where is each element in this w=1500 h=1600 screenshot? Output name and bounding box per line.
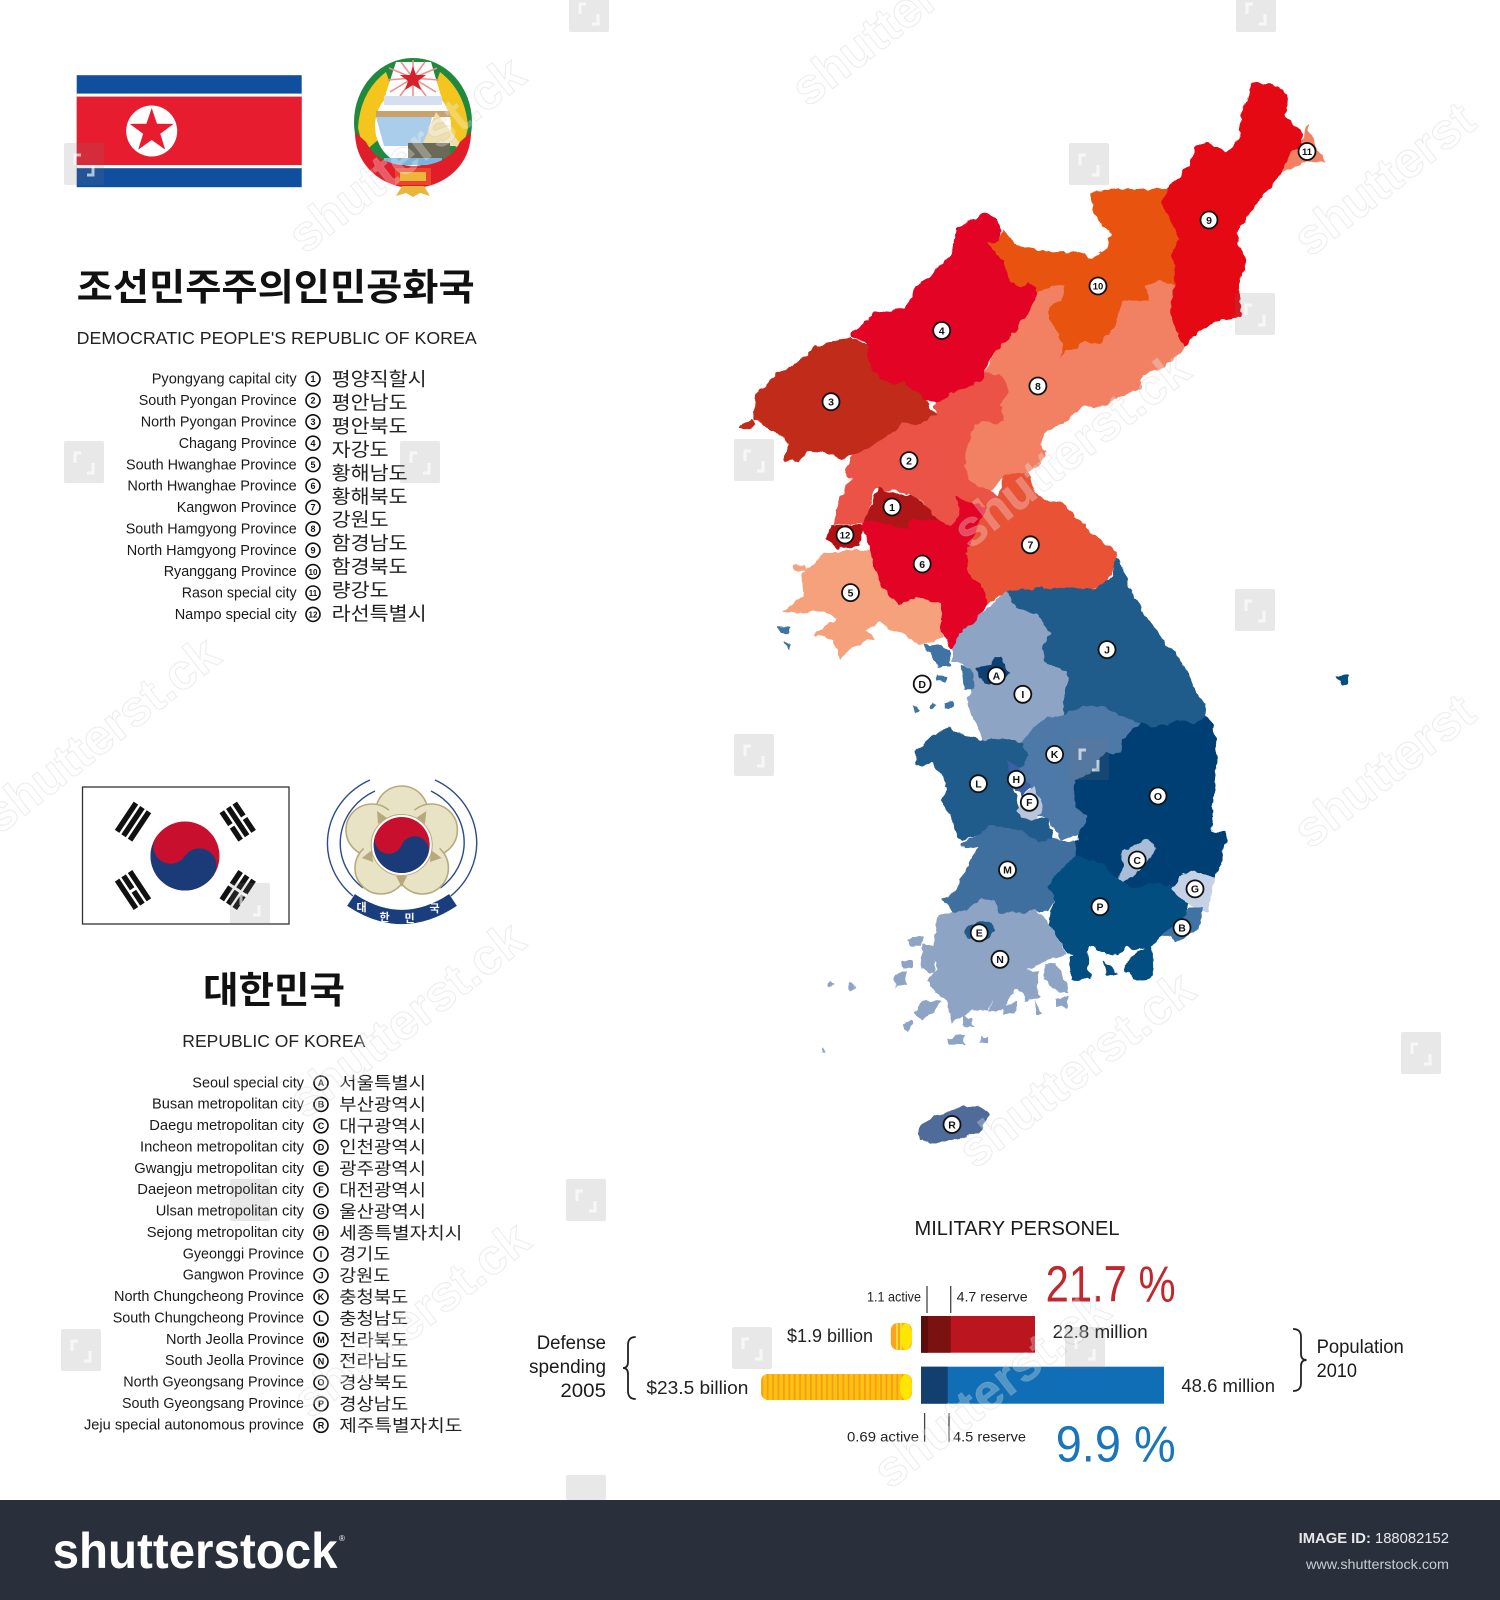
region: Gyeonggi	[953, 592, 1068, 743]
numbered badges: 9	[310, 545, 316, 555]
lettered badges	[314, 1076, 328, 1432]
lettered badges: J	[318, 1271, 324, 1281]
numbered badges: 1	[310, 374, 316, 384]
province names in English: South Hwanghae Province	[126, 456, 297, 473]
brace: defense spending	[623, 1337, 636, 1399]
map badges: South Korea letters: H	[1013, 774, 1020, 786]
label: South Korea active: 0.69 active	[847, 1428, 919, 1444]
footer website: www.shutterstock.com	[1305, 1556, 1449, 1572]
numbered badges	[306, 372, 320, 621]
map badges: South Korea letters: C	[1133, 855, 1141, 867]
numbered badges: 7	[310, 503, 316, 513]
map badges: North Korea numbers: 10	[1093, 282, 1103, 292]
region: Gangwon	[1006, 558, 1207, 728]
map badges: North Korea numbers: 1	[889, 502, 895, 514]
region: South Hamgyong	[965, 281, 1185, 490]
region: Seoul	[976, 658, 1010, 684]
panel: South Korea identity	[82, 780, 477, 1435]
map badges: South Korea letters: P	[1096, 902, 1104, 914]
province names in English: South Gyeongsang Province	[122, 1395, 304, 1412]
map: South Korea regions	[779, 558, 1349, 1144]
map: North Korea regions	[739, 83, 1325, 659]
numbered badges: 4	[310, 438, 316, 448]
label: North Korea active: 1.1 active	[867, 1288, 921, 1304]
province names in English: Jeju special autonomous province	[84, 1416, 304, 1433]
province names in English: Gwangju metropolitan city	[134, 1160, 304, 1177]
province names in Korean: 황해북도	[332, 486, 408, 508]
province names in Korean: 서울특별시	[339, 1074, 426, 1093]
icon: large coin stack	[761, 1374, 912, 1400]
lettered badges: L	[318, 1314, 324, 1324]
region: Ryanggang	[986, 188, 1179, 362]
province names in Korean: 경상북도	[339, 1374, 408, 1393]
stat: North Korea percentage: 21.7 %	[1046, 1256, 1176, 1313]
region: North Gyeongsang	[1073, 718, 1226, 888]
province names in Korean: 함경북도	[332, 556, 408, 578]
numbered badges: 12	[309, 611, 318, 620]
province names in Korean: 라선특별시	[332, 603, 427, 625]
province names in Korean	[339, 1074, 462, 1435]
map badges: North Korea numbers: 12	[840, 530, 850, 542]
map badges: North Korea numbers: 3	[828, 396, 834, 408]
decorative stock watermark: shutterst.ck	[277, 910, 535, 1129]
map: Korean peninsula	[739, 83, 1349, 1144]
map land with rough coastline	[739, 83, 1349, 1144]
province names in English: Nampo special city	[175, 606, 297, 623]
numbered badges: 5	[310, 460, 316, 470]
province names in Korean: 제주특별자치도	[339, 1416, 462, 1435]
province names in English: Gangwon Province	[183, 1267, 304, 1284]
map badges: South Korea letters: R	[948, 1119, 956, 1131]
region: Sejong	[1007, 760, 1029, 795]
region: Kangwon	[955, 473, 1117, 605]
map badges: South Korea letters: J	[1104, 644, 1110, 656]
province names in English: North Chungcheong Province	[114, 1288, 304, 1305]
lettered badges: H	[318, 1228, 324, 1238]
lettered badges: P	[318, 1399, 324, 1409]
province names in Korean: 충청남도	[339, 1309, 408, 1328]
region: Nampo	[826, 525, 864, 548]
bar: South Korea population	[921, 1367, 1164, 1404]
map badges: South Korea letters: M	[1003, 865, 1012, 877]
province names in English: North Pyongan Province	[141, 414, 297, 430]
label: North Korea reserve: 4.7 reserve	[957, 1288, 1028, 1304]
heading: North Korea Korean name: 조선민주주의인민공화국	[77, 267, 475, 308]
icon: South Korea emblem: 국	[430, 902, 440, 915]
region: North Jeolla	[943, 825, 1075, 914]
label: North Korea population: 22.8 million	[1053, 1322, 1148, 1342]
lettered badges: A	[318, 1078, 325, 1088]
region: North Hwanghae	[862, 498, 986, 647]
province names in Korean: 함경남도	[332, 533, 408, 555]
region: Ulsan	[1173, 871, 1215, 912]
label: population 2010: 2010	[1317, 1360, 1357, 1382]
region: Daegu	[1119, 841, 1154, 880]
province names in English: North Gyeongsang Province	[123, 1374, 304, 1391]
province names in Korean: 대전광역시	[339, 1181, 426, 1200]
province names in Korean: 대구광역시	[339, 1117, 426, 1136]
province names in English: Chagang Province	[179, 435, 297, 452]
label: defense spending: 2005	[560, 1380, 606, 1402]
label: South Korea reserve: 4.5 reserve	[953, 1428, 1026, 1444]
numbered badges: 6	[310, 481, 316, 491]
province names in English: Ryanggang Province	[164, 563, 297, 580]
region: Jeju	[918, 1106, 988, 1144]
icon: South Korea emblem	[327, 780, 477, 925]
map badges: North Korea numbers: 9	[1206, 215, 1212, 227]
province names in English: Daejeon metropolitan city	[137, 1181, 304, 1198]
numbered badges: 10	[309, 568, 318, 577]
decorative stock watermark: shutterst	[1282, 91, 1486, 267]
province names in Korean: 량강도	[332, 579, 389, 601]
footer bar	[0, 1500, 1500, 1600]
panel: military personnel comparison	[529, 1218, 1404, 1473]
map badges: North Korea numbers: 11	[1302, 147, 1313, 158]
map badges: South Korea letters: O	[1154, 791, 1162, 803]
map badges: North Korea numbers	[822, 143, 1316, 601]
province names in Korean: 울산광역시	[339, 1202, 426, 1221]
map badges: South Korea letters: N	[996, 954, 1004, 966]
map badges: South Korea letters: L	[975, 778, 982, 790]
province names in English: Incheon metropolitan city	[140, 1138, 304, 1155]
province names in Korean: 평안남도	[332, 392, 408, 414]
province names in English: North Hamgyong Province	[127, 542, 297, 559]
decorative stock watermark: shutterst.ck	[947, 960, 1205, 1179]
map badges: North Korea numbers: 5	[848, 587, 854, 599]
tick marks: active and reserve	[925, 1286, 951, 1442]
lettered badges: M	[317, 1335, 325, 1345]
decorative stock watermark: shutterst.ck	[862, 1280, 1120, 1499]
lettered badges: K	[318, 1292, 325, 1302]
province names in Korean: 강원도	[332, 509, 389, 531]
province names in English: Daegu metropolitan city	[149, 1117, 304, 1134]
footer image id: IMAGE ID: 188082152	[1299, 1530, 1449, 1547]
region: North Pyongan	[739, 337, 937, 462]
map badges: North Korea numbers: 8	[1035, 381, 1041, 393]
region: Rason	[1280, 125, 1325, 173]
decorative stock watermark: shutterst.ck	[942, 340, 1200, 559]
province names in English: Rason special city	[182, 585, 297, 602]
map badges: North Korea numbers: 4	[939, 325, 945, 337]
map badges: South Korea letters	[914, 641, 1204, 1133]
province names in English: Ulsan metropolitan city	[156, 1203, 304, 1220]
flag: North Korea	[77, 75, 302, 187]
region: Incheon	[779, 627, 974, 712]
lettered badges: B	[318, 1100, 325, 1110]
legend: North Korea provinces	[126, 369, 427, 625]
label: population 2010	[1317, 1336, 1404, 1382]
map badges: North Korea numbers: 7	[1027, 540, 1033, 552]
province names in English: South Hamgyong Province	[126, 520, 297, 537]
map badges: North Korea numbers: 6	[919, 559, 925, 571]
province names in Korean: 전라남도	[339, 1352, 408, 1371]
label: defense spending: spending	[529, 1356, 606, 1378]
province names in English	[126, 371, 297, 623]
lettered badges: I	[320, 1249, 322, 1259]
region: Pyongyang	[866, 488, 938, 531]
province names in English: South Chungcheong Province	[113, 1309, 304, 1326]
province names in Korean: 평양직할시	[332, 369, 427, 391]
numbered badges: 11	[309, 589, 318, 598]
legend: South Korea provinces	[84, 1074, 462, 1435]
label: population 2010: Population	[1317, 1336, 1404, 1358]
map badges: South Korea letters: I	[1021, 689, 1024, 701]
heading: military personnel: MILITARY PERSONEL	[914, 1218, 1120, 1240]
province names in English: Gyeonggi Province	[183, 1245, 304, 1262]
province names in Korean: 전라북도	[339, 1331, 408, 1350]
map badges: South Korea letters: F	[1026, 797, 1033, 809]
region: Chagang	[851, 213, 1038, 406]
province names in English: South Jeolla Province	[165, 1352, 304, 1369]
stat: South Korea percentage: 9.9 %	[1056, 1416, 1176, 1473]
lettered badges: E	[318, 1164, 324, 1174]
numbered badges: 3	[310, 417, 316, 427]
province names in Korean: 충청북도	[339, 1288, 408, 1307]
region: Busan	[1161, 908, 1203, 941]
province names in English: Sejong metropolitan city	[147, 1224, 304, 1241]
decorative stock watermark: shutterst.ck	[277, 45, 535, 264]
province names in English: North Jeolla Province	[166, 1331, 304, 1348]
lettered badges: D	[318, 1142, 325, 1152]
map badges: South Korea letters: A	[993, 670, 1001, 682]
footer logo registered mark: ®	[339, 1534, 345, 1543]
icon: South Korea emblem: 한	[380, 910, 390, 924]
numbered badges: 8	[310, 524, 316, 534]
map badges: South Korea letters: D	[918, 679, 926, 691]
lettered badges: O	[317, 1378, 325, 1388]
icon: North Korea emblem	[354, 58, 472, 197]
province names in English: South Pyongan Province	[139, 392, 297, 409]
bar: North Korea population	[921, 1316, 1035, 1353]
map badges: North Korea numbers: 2	[906, 455, 912, 467]
panel: North Korea identity	[77, 58, 477, 625]
region: South Pyongan	[833, 372, 1010, 525]
icon: small coin stack	[891, 1323, 912, 1350]
map badges: South Korea letters: E	[976, 928, 983, 940]
label: defense spending: Defense	[537, 1332, 606, 1354]
province names in English: North Hwanghae Province	[127, 478, 297, 495]
icon: South Korea emblem: 대	[356, 900, 367, 914]
lettered badges: C	[318, 1121, 325, 1131]
province names in English: Kangwon Province	[177, 499, 297, 516]
lettered badges: R	[318, 1420, 325, 1430]
numbered badges: 2	[310, 396, 316, 406]
icon: South Korea emblem: 민	[404, 912, 415, 925]
region: South Hwanghae	[783, 550, 943, 659]
region: North Chungcheong	[1018, 706, 1140, 839]
region: Daejeon	[1018, 787, 1043, 819]
map badges: South Korea letters: G	[1191, 884, 1199, 896]
region: Gwangju	[964, 922, 996, 941]
map badges: South Korea letters: K	[1051, 749, 1059, 761]
heading: North Korea English name: DEMOCRATIC PEOPLE'S REPUBLIC OF KOREA	[77, 328, 477, 348]
heading: South Korea English name: REPUBLIC OF KOREA	[182, 1031, 366, 1051]
province names in Korean: 강원도	[339, 1267, 390, 1286]
label: North Korea spending: $1.9 billion	[787, 1326, 873, 1346]
province names in Korean: 부산광역시	[339, 1095, 426, 1114]
map badges: South Korea letters: B	[1178, 922, 1186, 934]
province names in Korean: 자강도	[332, 439, 389, 461]
label: South Korea population: 48.6 million	[1181, 1376, 1275, 1396]
province names in Korean: 경기도	[339, 1245, 390, 1264]
lettered badges: G	[317, 1207, 325, 1217]
footer logo: shutterstock	[53, 1523, 338, 1579]
region: South Chungcheong	[915, 728, 1052, 843]
province names in English	[84, 1074, 304, 1433]
province names in Korean: 인천광역시	[339, 1138, 426, 1157]
label: South Korea spending: $23.5 billion	[646, 1378, 748, 1398]
decorative stock watermark: shutterst	[1282, 683, 1486, 859]
province names in Korean: 황해남도	[332, 462, 408, 484]
region: Dokdo	[1337, 675, 1349, 684]
province names in Korean: 평안북도	[332, 416, 408, 438]
province names in English: Pyongyang capital city	[152, 371, 297, 388]
province names in Korean: 세종특별자치시	[339, 1224, 462, 1243]
lettered badges: N	[318, 1356, 324, 1366]
flag: South Korea	[82, 787, 289, 924]
brace: population	[1293, 1329, 1307, 1391]
decorative stock watermark: shutterst.ck	[282, 1210, 540, 1429]
province names in Korean: 경상남도	[339, 1395, 408, 1414]
province names in English: Busan metropolitan city	[152, 1096, 304, 1113]
region: South Gyeongsang	[1047, 854, 1188, 981]
province names in Korean	[332, 369, 427, 625]
lettered badges: F	[318, 1185, 324, 1195]
region: South Jeolla	[822, 898, 1068, 1052]
heading: South Korea Korean name: 대한민국	[203, 970, 345, 1011]
province names in Korean: 광주광역시	[339, 1160, 426, 1179]
label: defense spending	[529, 1332, 606, 1402]
province names in English: Seoul special city	[192, 1074, 304, 1091]
region: North Hamgyong	[1160, 83, 1303, 349]
